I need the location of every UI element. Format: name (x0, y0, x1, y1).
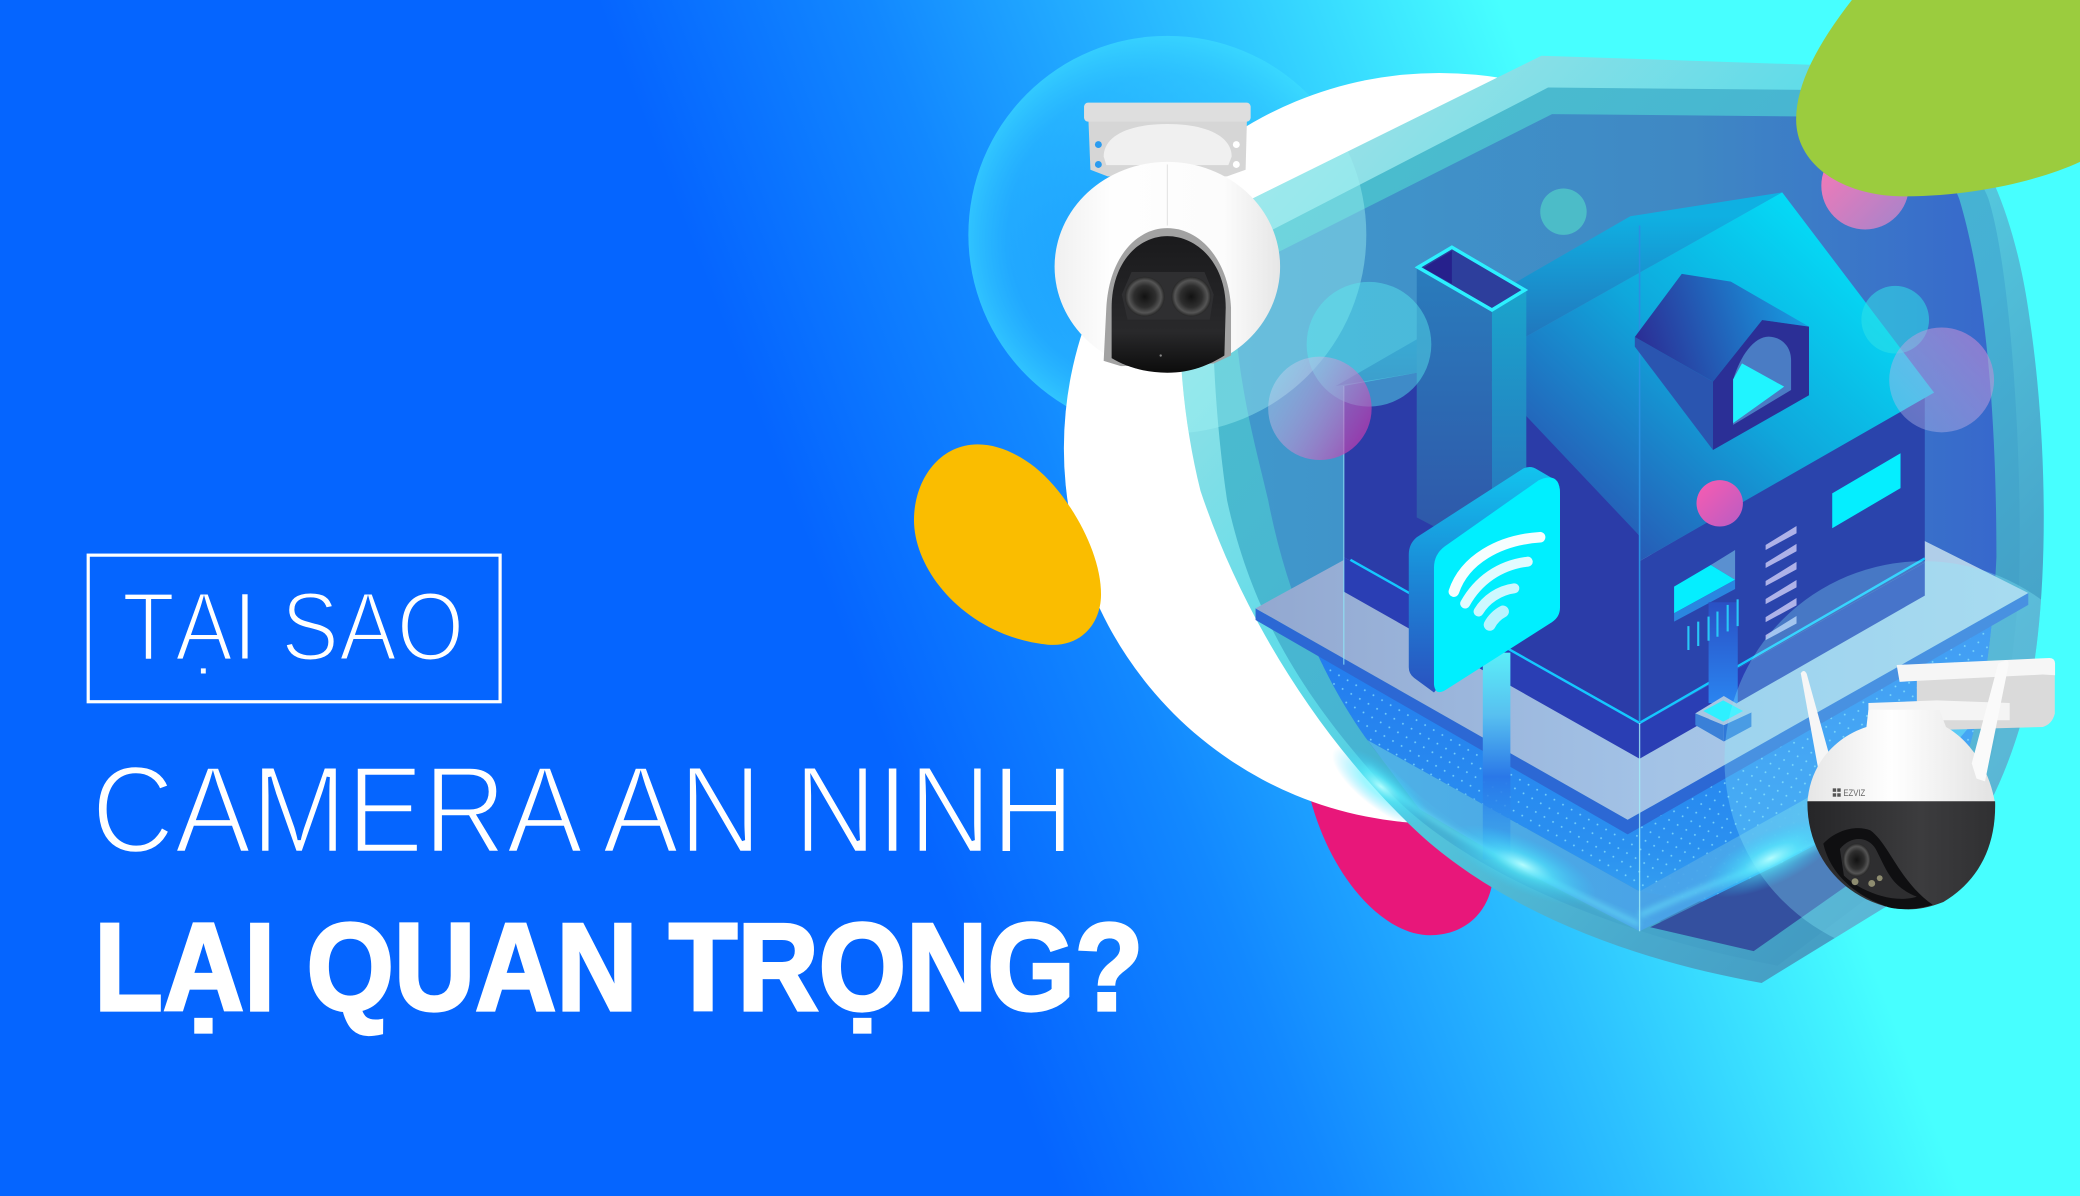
drip lines (1688, 599, 1738, 650)
dark shield base (1650, 809, 1937, 951)
cube left side (1695, 713, 1724, 742)
light beam (1709, 602, 1738, 703)
camera black dome (1807, 801, 1995, 909)
lower window pane (1711, 550, 1735, 580)
mount bracket (1088, 119, 1247, 176)
right wall windows (1674, 453, 1901, 703)
bracket holes right (1233, 141, 1240, 168)
sign back plate (1409, 467, 1560, 692)
corner line upper (1639, 226, 1641, 723)
lilac bubble right (1889, 328, 1994, 432)
lower window (1674, 565, 1735, 613)
cyan bubble left (1307, 282, 1431, 407)
indicator dot (1160, 354, 1162, 357)
right lens (1171, 277, 1211, 317)
lens housing inner (1840, 839, 1917, 899)
glow spot middle (1439, 808, 1606, 922)
large bubble behind bottom camera (1724, 561, 2041, 938)
top camera (1055, 103, 1280, 373)
glow effects (1321, 733, 1857, 925)
mount lower bracket (1917, 671, 2055, 730)
back roof (1336, 192, 1782, 386)
chimney (1417, 247, 1526, 557)
wifi icon (1454, 537, 1540, 625)
lilac bubble left (1268, 357, 1372, 460)
pink circle behind green blob (1821, 142, 1909, 229)
halo overlay on shield (1182, 152, 1366, 432)
dormer roof (1635, 274, 1809, 382)
dormer light (1733, 363, 1784, 423)
chimney side (1492, 290, 1526, 557)
lens (1843, 843, 1871, 877)
box text: TẠI SAO (122, 572, 464, 681)
box outline (88, 555, 500, 702)
chimney opening (1418, 247, 1525, 310)
mount plate (1084, 103, 1251, 122)
LED lights (1852, 875, 1883, 887)
pink bubble (1696, 480, 1743, 526)
shield outer band (1180, 56, 2044, 983)
base highlight lines (1350, 558, 1925, 723)
brand logo (1833, 788, 1841, 797)
glow spot right (1694, 803, 1848, 913)
chimney inner shadow (1423, 251, 1452, 284)
title box: TẠI SAO (88, 555, 500, 702)
lower window sill (1674, 580, 1735, 622)
right roof (1526, 192, 1934, 561)
house (1336, 192, 1934, 931)
shield inner panel (1234, 114, 1996, 950)
window stripes (1766, 526, 1797, 640)
left edge line (1343, 386, 1345, 665)
sign front (1434, 477, 1560, 692)
glow spot left (1321, 733, 1441, 840)
green blob (1796, 0, 2080, 196)
shield middle band (1213, 88, 2020, 966)
floating platform (1256, 398, 2028, 834)
camera body (1055, 162, 1280, 371)
bottom camera (1801, 658, 2055, 909)
camera face rim (1104, 228, 1231, 366)
bracket holes left (1095, 141, 1102, 168)
left antenna (1801, 671, 1828, 770)
sign pole (1483, 653, 1510, 860)
dormer opening (1733, 337, 1791, 425)
pink blob (1307, 783, 1492, 935)
wifi sign (1409, 467, 1560, 860)
lower chevron layer (1368, 729, 1968, 931)
dormer side (1635, 337, 1713, 450)
right wall (1640, 397, 1925, 724)
lens housing outer (1823, 828, 1933, 909)
white blob (1064, 73, 1815, 824)
right antenna (1972, 661, 2009, 781)
left wall (1344, 373, 1640, 724)
platform top (1256, 398, 2028, 820)
left lens (1125, 277, 1165, 317)
title line: LẠI QUAN TRỌNG?: LẠI QUAN TRỌNG? (94, 898, 1143, 1037)
cube right side (1724, 712, 1751, 742)
camera neck (1104, 124, 1232, 165)
camera face (1112, 236, 1226, 373)
platform edge (1256, 593, 2028, 834)
brand text: EZVIZ (1843, 788, 1866, 798)
halo circle behind top camera (968, 36, 1366, 434)
camera white shell (1807, 710, 1995, 804)
camera collar arm (1868, 700, 2010, 723)
cyan bubble right (1861, 286, 1929, 354)
floating bubbles (1268, 189, 1994, 527)
mount box (1897, 658, 2055, 682)
dotted floor under platform (1318, 626, 1992, 902)
title line: CAMERA AN NINH: CAMERA AN NINH (92, 741, 1074, 880)
lens bar (1122, 272, 1214, 320)
glow sweep line right (1640, 829, 1857, 915)
teal bubble (1540, 189, 1587, 235)
small cube (1695, 696, 1751, 742)
chimney front (1417, 267, 1492, 557)
upper window (1832, 453, 1901, 528)
cube light (1703, 700, 1743, 722)
cube top (1695, 696, 1751, 725)
corner line lower (1639, 723, 1641, 931)
yellow blob (914, 444, 1101, 645)
shield (1180, 56, 2044, 983)
dormer front (1713, 320, 1809, 450)
glow sweep line (1366, 767, 1640, 925)
house base (1344, 557, 1925, 759)
body seam (1166, 164, 1168, 226)
dormer window (1635, 274, 1809, 450)
